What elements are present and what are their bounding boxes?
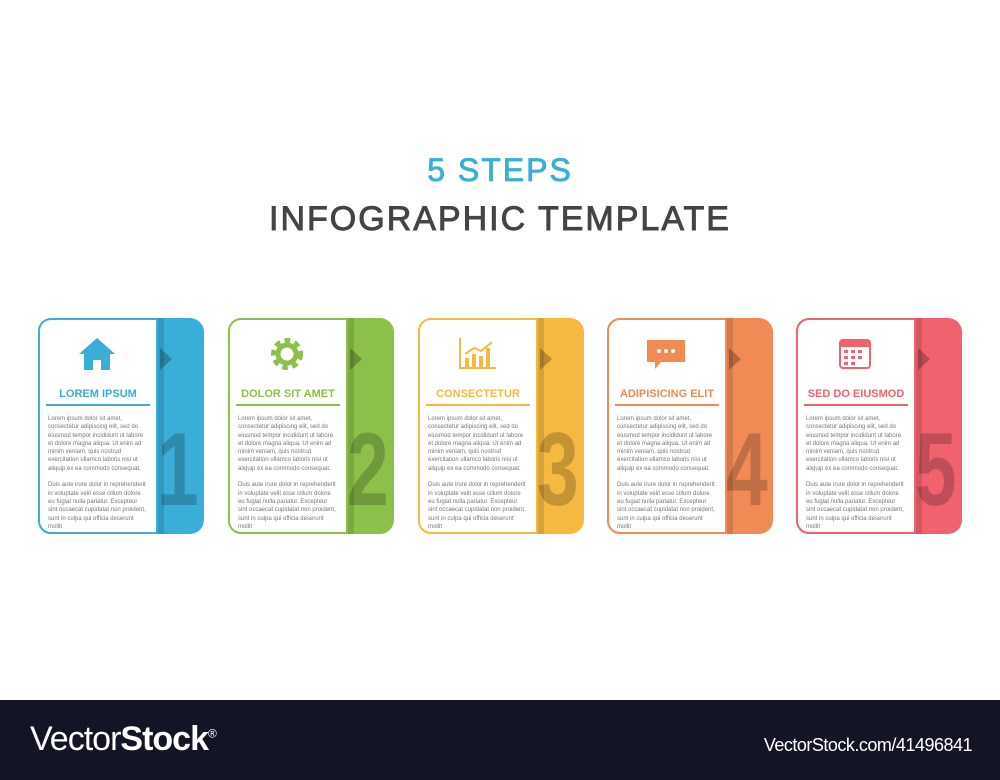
heading 2 (236, 388, 340, 406)
text 3: Lorem ipsum dolor sit amet, consectetur adipiscing elit, sed do eiusmod tempor incididunt ut labore et dolore magna aliqua. Ut enim ad minim veniam, quis nostrud exercitation ullamco laboris nisi ut aliquip ex ea commodo consequat. (428, 416, 523, 472)
footer bar (0, 700, 1000, 780)
heading 3 (426, 388, 530, 406)
text 4 (617, 416, 715, 530)
heading 3: CONSECTETUR (436, 388, 520, 400)
text 5: Lorem ipsum dolor sit amet, consectetur adipiscing elit, sed do eiusmod tempor incididunt ut labore et dolore magna aliqua. Ut enim ad minim veniam, quis nostrud exercitation ullamco laboris nisi ut aliquip ex ea commodo consequat. (806, 416, 901, 472)
number 2: 2 (347, 412, 389, 528)
panel: step 1 (38, 318, 204, 534)
icon: chat bubble (647, 340, 685, 369)
text 4: Lorem ipsum dolor sit amet, consectetur adipiscing elit, sed do eiusmod tempor incididunt ut labore et dolore magna aliqua. Ut enim ad minim veniam, quis nostrud exercitation ullamco laboris nisi ut aliquip ex ea commodo consequat. (617, 416, 712, 472)
text 5 (806, 416, 904, 530)
icon: gear (271, 338, 303, 370)
subtitle: INFOGRAPHIC TEMPLATE (269, 200, 731, 238)
heading 1 (46, 388, 150, 406)
text 1: Duis aute irure dolor in reprehenderit in voluptate velit esse cillum dolore eu fugiat nulla pariatur. Excepteur sint occaecat cupidatat non proident, sunt in culpa qui officia deserunt mollit (48, 482, 146, 530)
heading 2: DOLOR SIT AMET (241, 388, 335, 400)
text 5: Duis aute irure dolor in reprehenderit in voluptate velit esse cillum dolore eu fugiat nulla pariatur. Excepteur sint occaecat cupidatat non proident, sunt in culpa qui officia deserunt mollit (806, 482, 904, 530)
text 1: Lorem ipsum dolor sit amet, consectetur adipiscing elit, sed do eiusmod tempor incididunt ut labore et dolore magna aliqua. Ut enim ad minim veniam, quis nostrud exercitation ullamco laboris nisi ut aliquip ex ea commodo consequat. (48, 416, 143, 472)
icon: calendar (839, 339, 871, 369)
icon: house (79, 338, 115, 370)
heading 5: SED DO EIUSMOD (808, 388, 904, 400)
number 4: 4 (726, 412, 768, 528)
footer logo: VectorStock® (30, 720, 216, 758)
text 2 (238, 416, 336, 530)
number 3: 3 (537, 412, 579, 528)
heading 4 (615, 388, 719, 406)
number 1: 1 (157, 412, 199, 528)
footer url: VectorStock.com/41496841 (764, 735, 972, 755)
panel: step 3 (418, 318, 584, 534)
number 5: 5 (915, 412, 957, 528)
heading 1: LOREM IPSUM (59, 388, 137, 400)
text 2: Lorem ipsum dolor sit amet, consectetur adipiscing elit, sed do eiusmod tempor incididunt ut labore et dolore magna aliqua. Ut enim ad minim veniam, quis nostrud exercitation ullamco laboris nisi ut aliquip ex ea commodo consequat. (238, 416, 333, 472)
title: 5 STEPS (427, 152, 573, 188)
panel: step 5 (796, 318, 962, 534)
panel: step 4 (607, 318, 773, 534)
icon: chart (459, 338, 496, 369)
panel: step 2 (228, 318, 394, 534)
heading 4: ADIPISICING ELIT (620, 388, 714, 400)
text 2: Duis aute irure dolor in reprehenderit in voluptate velit esse cillum dolore eu fugiat nulla pariatur. Excepteur sint occaecat cupidatat non proident, sunt in culpa qui officia deserunt mollit (238, 482, 336, 530)
text 3 (428, 416, 526, 530)
text 4: Duis aute irure dolor in reprehenderit in voluptate velit esse cillum dolore eu fugiat nulla pariatur. Excepteur sint occaecat cupidatat non proident, sunt in culpa qui officia deserunt mollit (617, 482, 715, 530)
heading 5 (804, 388, 908, 406)
text 3: Duis aute irure dolor in reprehenderit in voluptate velit esse cillum dolore eu fugiat nulla pariatur. Excepteur sint occaecat cupidatat non proident, sunt in culpa qui officia deserunt mollit (428, 482, 526, 530)
text 1 (48, 416, 146, 530)
